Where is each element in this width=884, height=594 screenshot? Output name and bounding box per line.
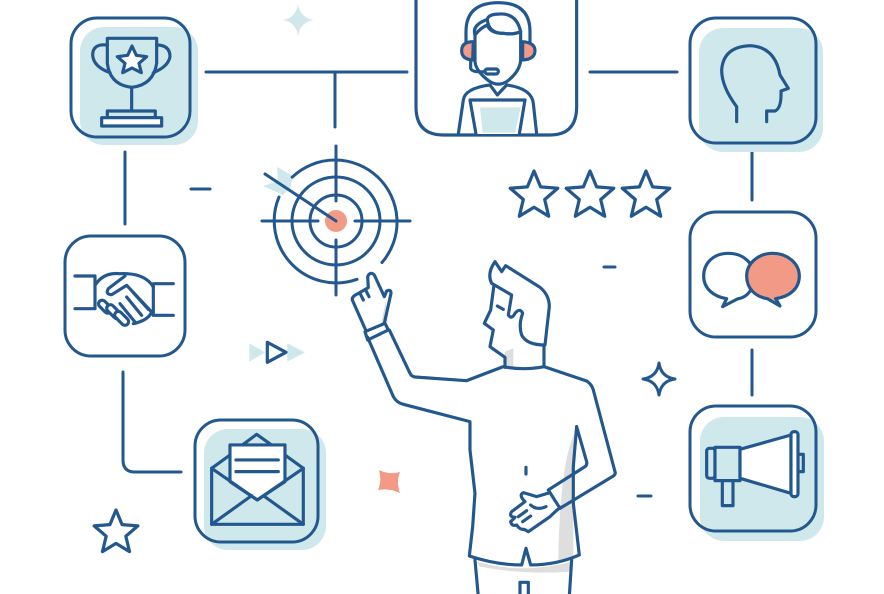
figure shading (477, 348, 577, 573)
figure: man pointing at target (352, 262, 615, 594)
figure wristband (365, 323, 388, 340)
icon: agent microphone (471, 61, 485, 72)
figure trousers (475, 560, 572, 594)
icon: play arrows (249, 342, 305, 362)
figure lower sleeve and cuff (548, 427, 587, 508)
panel: megaphone (690, 406, 824, 541)
icon: outlined sparkle (643, 363, 675, 395)
icon: target (262, 146, 410, 295)
connector lines (123, 72, 752, 472)
icon: rating star 2 (566, 171, 614, 216)
panel: email (195, 420, 326, 550)
icon: agent face (475, 25, 521, 84)
icon: megaphone (707, 432, 803, 506)
icon: speech bubbles (704, 253, 799, 307)
small dashes (191, 189, 651, 496)
panel: trophy (71, 18, 198, 145)
target arrow fletching (263, 167, 293, 195)
icon: agent hair (474, 14, 521, 35)
figure lower hand (511, 493, 561, 532)
panel: support agent (416, 0, 577, 135)
icon: agent shoulders (458, 85, 537, 134)
figure torso and raised arm (368, 337, 579, 565)
icon: handshake (75, 273, 173, 327)
panel: handshake (65, 236, 185, 356)
target rings (262, 146, 410, 295)
figure mark (521, 467, 531, 474)
figure face (484, 285, 544, 367)
panel: speech bubbles (690, 212, 816, 337)
icon: trophy (93, 38, 170, 126)
icon: rating star 3 (622, 171, 670, 216)
target bullseye (325, 210, 347, 232)
icon: light sparkle (283, 4, 314, 36)
icon: agent laptop (470, 100, 525, 134)
icon: agent ear cups (462, 42, 535, 60)
icon: open envelope (212, 434, 303, 524)
icon: head profile (722, 46, 788, 122)
icon: agent headband (466, 3, 530, 43)
figure hair (490, 262, 549, 345)
icon: rating star 1 (510, 171, 558, 216)
figure raised hand (352, 273, 391, 340)
icon: coral sparkle (378, 470, 400, 493)
icon: star bottom left (94, 510, 138, 552)
panel: head profile (690, 18, 823, 152)
